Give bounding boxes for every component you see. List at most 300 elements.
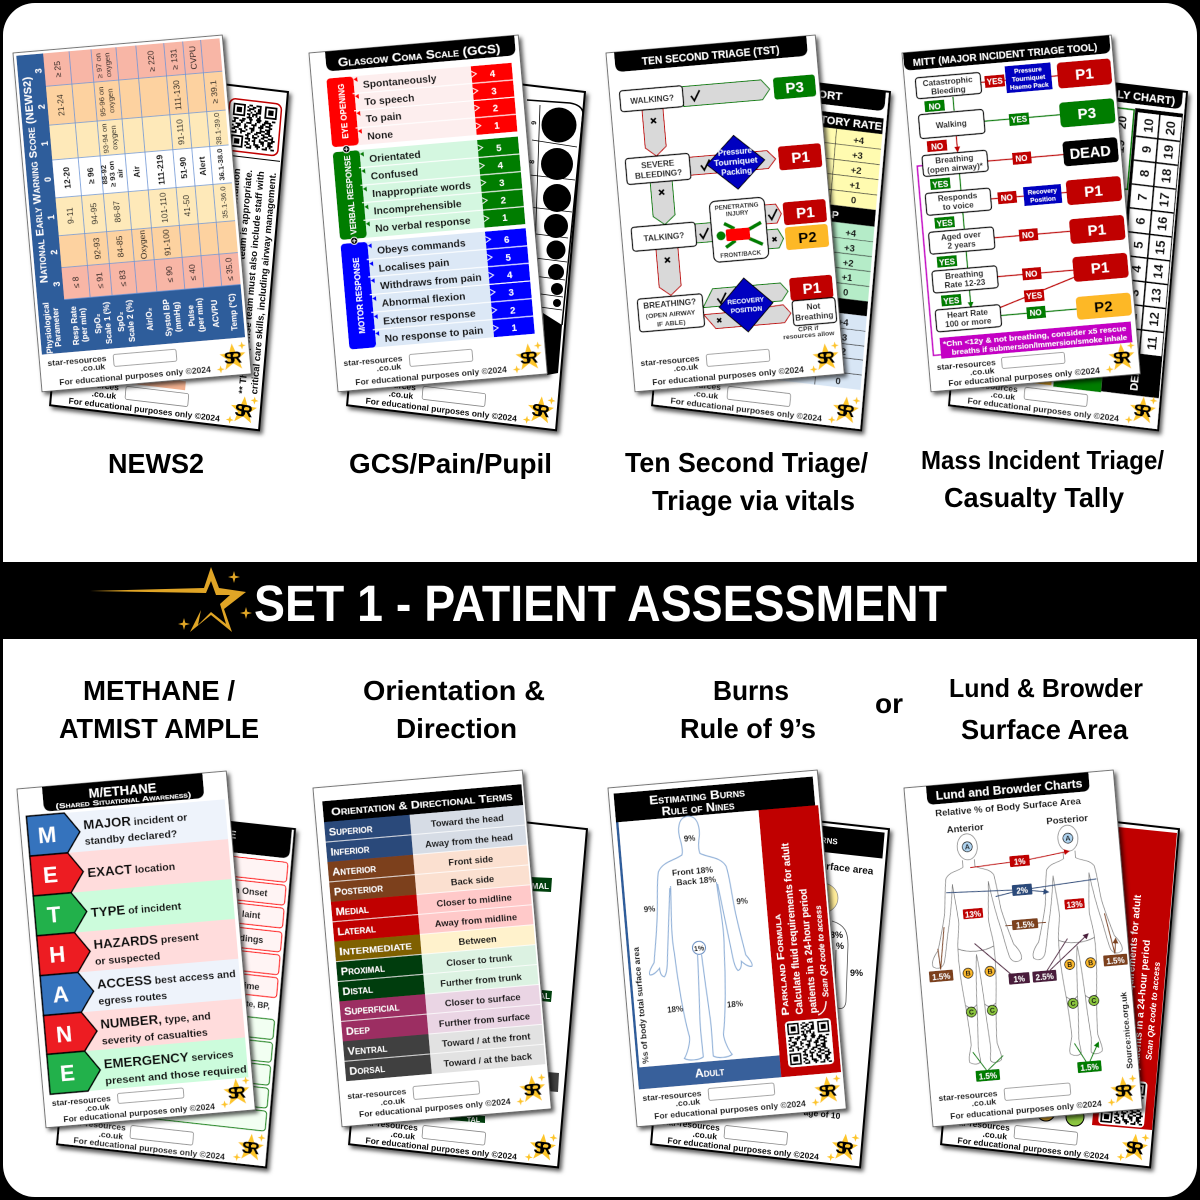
view labels	[946, 813, 1089, 836]
section: eye opening: 3	[491, 86, 497, 98]
footer: For educational purposes only ©2024	[950, 1098, 1102, 1121]
footer: For educational purposes only ©2024	[948, 365, 1101, 388]
priority badges: P1	[1087, 221, 1107, 240]
question boxes: TALKING?	[643, 231, 685, 243]
footer: SR	[1133, 400, 1152, 421]
table values: 91-100	[161, 229, 173, 256]
adult panel: Adult	[694, 1064, 725, 1081]
table values: ≥ 39.1	[208, 80, 220, 104]
heading: lund and browder	[949, 673, 1143, 745]
table values: 92-93	[91, 237, 103, 260]
row text: or suspected	[95, 950, 161, 968]
region letters: C	[990, 1008, 995, 1015]
region letters: C	[969, 1009, 974, 1017]
footer: SR	[818, 1081, 837, 1101]
section: verbal response: 4	[497, 160, 504, 172]
injury box with figure: FRONT/BACK	[720, 249, 762, 260]
header band: Glasgow Coma Scale (GCS)	[337, 42, 501, 70]
priority badges	[1055, 58, 1132, 320]
decision boxes	[915, 72, 1002, 332]
region letters: A	[1065, 835, 1071, 843]
section: motor response: Withdraws from pain	[380, 273, 482, 292]
caption: surface area	[814, 860, 874, 878]
definitions: Toward / at the back	[443, 1051, 533, 1069]
section: verbal response: 1	[502, 213, 509, 224]
section: verbal response: 3	[499, 178, 505, 189]
section: motor response: 3	[508, 287, 514, 299]
terms	[328, 821, 423, 1078]
parameter header: Scale 2 (%)	[124, 299, 137, 342]
table values: 101-110	[157, 192, 170, 223]
letters: E	[59, 1060, 76, 1086]
tag fragments	[450, 877, 559, 1124]
footer: star-resources	[60, 375, 120, 392]
header band: Lund and Browder Charts	[935, 778, 1083, 803]
footer: .co.uk	[388, 388, 414, 401]
section: eye opening: To pain	[365, 111, 402, 125]
header band	[91, 808, 292, 859]
footer	[659, 1112, 860, 1166]
section: motor response: 1	[511, 323, 518, 334]
percent tags: 2.5%	[1035, 972, 1054, 982]
table values: ≤ 35.0	[223, 257, 235, 281]
terms: Distal	[342, 984, 374, 998]
row text: NUMBER, type, and	[100, 1007, 211, 1032]
panel: ATMIST AMPLE back card	[57, 806, 295, 1167]
footer: .co.uk	[971, 1096, 997, 1108]
terms: Medial	[335, 904, 369, 918]
footer: .co.uk	[390, 1129, 416, 1142]
table values: oxygen	[105, 88, 116, 113]
blue action boxes: Position	[1030, 195, 1056, 205]
row text: EMERGENCY services	[103, 1046, 234, 1072]
vitals table: +3	[851, 150, 863, 162]
row backgrounds	[59, 799, 248, 1091]
yes and no tags: NO	[1022, 230, 1034, 240]
footer: .co.uk	[91, 388, 117, 401]
footer: .co.uk	[85, 1101, 110, 1113]
decision boxes: Responds	[937, 191, 978, 203]
footer	[47, 341, 248, 388]
blue action boxes	[1005, 62, 1062, 207]
yes and no tags: NO	[1000, 193, 1013, 203]
header band: TEN SECOND TRIAGE (TST)	[641, 44, 780, 68]
parameter header: Scale 1 (%)	[102, 301, 114, 344]
letters: E	[42, 862, 59, 888]
question boxes: (OPEN AIRWAY	[646, 309, 696, 321]
table values: ≥ 25	[52, 60, 63, 78]
red parkland panel: requirements for adult	[1124, 894, 1144, 1001]
percent tags: 13%	[1066, 900, 1083, 910]
action diamonds	[705, 133, 779, 334]
table values: 84-85	[114, 235, 126, 258]
yes and no tags	[922, 73, 1046, 327]
footer: SR	[1125, 1138, 1144, 1159]
footer: .co.uk	[693, 388, 719, 401]
tally grid	[1111, 108, 1183, 398]
footer: star-resources	[959, 377, 1018, 394]
footer: For educational purposes only ©2024	[355, 364, 507, 387]
heading: orientation and direction	[363, 675, 545, 744]
section: motor response: 6	[504, 235, 510, 246]
decision boxes: 100 or more	[945, 316, 992, 329]
score header: 1	[40, 141, 50, 147]
score header: 0	[43, 177, 53, 182]
injury box with figure: INJURY	[726, 209, 750, 218]
footer: .co.uk	[376, 361, 402, 373]
table values: ≤ 90	[164, 266, 175, 283]
panel: orientation back card	[349, 806, 587, 1167]
score header: 2	[49, 249, 59, 255]
table values: ≥ 131	[168, 48, 180, 70]
footer	[51, 1076, 252, 1125]
panel: triage via vitals back card	[652, 67, 890, 430]
region letters: C	[1091, 998, 1097, 1005]
table values: 86-87	[111, 200, 123, 223]
footer: For educational purposes only ©2024	[652, 364, 804, 387]
vitals table: 0	[850, 195, 857, 207]
table values: oxygen	[109, 125, 120, 150]
footer: SR	[241, 1138, 260, 1159]
footer: .co.uk	[982, 1129, 1008, 1142]
magenta note: breaths if submersion/Immersion/smoke inhale	[951, 333, 1127, 357]
tally grid: 15	[1152, 240, 1168, 256]
section: eye opening: EYE OPENING	[337, 83, 350, 139]
definitions: Back side	[450, 874, 495, 888]
priority badges: P3	[785, 79, 805, 97]
footer: For educational purposes only ©2024	[667, 1135, 819, 1162]
section: motor response: Abnormal flexion	[381, 292, 466, 310]
footer: star-resources	[67, 1116, 127, 1133]
parameter header: (mmHg)	[172, 301, 183, 332]
decision boxes: (open airway)*	[927, 161, 984, 175]
tag fragments: MAL	[532, 882, 549, 891]
tally grid: 11	[1144, 335, 1160, 351]
header band: REPORT	[794, 86, 843, 103]
footer: For educational purposes only ©2024	[967, 396, 1120, 424]
section: motor response: Obeys commands	[377, 238, 466, 257]
table values: ≥ 97 on	[93, 53, 104, 79]
footer: For educational purposes only ©2024	[365, 396, 518, 424]
footer: star-resources	[343, 353, 403, 368]
panel: rule of nines front card	[608, 770, 846, 1127]
percent tags: 13%	[965, 909, 981, 920]
letters: N	[55, 1021, 73, 1048]
tally grid: 14	[1150, 263, 1166, 280]
icon: QR code	[226, 98, 282, 156]
action diamonds: RECOVERY	[727, 296, 765, 307]
blue action boxes: Pressure	[1014, 66, 1043, 75]
heading: GCS/Pain/Pupil: GCS/Pain/Pupil	[349, 448, 552, 479]
decision boxes: Rate 12-23	[944, 278, 986, 290]
notes text: critical care skills, including airway management.	[249, 172, 279, 395]
heading: or: or	[875, 688, 903, 719]
heading: ten second triage: Ten Second Triage/	[625, 447, 868, 478]
footer: .co.uk	[990, 389, 1016, 402]
terms: Dorsal	[349, 1063, 386, 1078]
table values: 36.1-38.0	[215, 148, 227, 181]
footer: .co.uk	[692, 1129, 718, 1142]
row text: standby declared?	[84, 828, 178, 848]
footer	[65, 1112, 266, 1166]
header band	[687, 68, 886, 111]
table values: ≥ 96	[85, 167, 96, 184]
heading: NEWS2: NEWS2	[108, 448, 204, 479]
percent tags: 1.5%	[1016, 920, 1035, 930]
footer: For educational purposes only ©2024	[68, 396, 221, 424]
terms: Deep	[345, 1024, 371, 1038]
panel: casualty tally back card	[949, 67, 1187, 430]
terms: Proximal	[340, 963, 386, 978]
decision boxes: to voice	[942, 200, 975, 212]
section: verbal response: Confused	[370, 168, 419, 183]
row fragments: ime	[244, 980, 260, 992]
definitions: Toward the head	[430, 813, 505, 829]
score header: 3	[52, 281, 62, 287]
parkland panel: Scan QR code to access	[813, 905, 831, 998]
section: eye opening	[326, 63, 517, 147]
table remnant	[93, 370, 186, 390]
category strips: DEAD	[1128, 359, 1143, 392]
body diagram: 1%	[694, 945, 705, 953]
yes and no tags: YES	[943, 296, 960, 306]
footer: SR	[523, 1080, 542, 1100]
percent tags	[920, 847, 1137, 1085]
footer: .co.uk	[380, 1095, 406, 1107]
decision boxes: 2 years	[947, 239, 977, 251]
icon: plus signs	[342, 145, 358, 245]
priority badges: DEAD	[1069, 144, 1111, 163]
table values: ≥ 220	[145, 50, 157, 72]
section: verbal response: 2	[500, 195, 506, 207]
parameter header: Air/O₂	[144, 307, 155, 331]
heading: mass incident triage: Mass Incident Triage/	[921, 445, 1164, 475]
vitals table: +2	[835, 346, 846, 358]
definitions: Toward / at the front	[442, 1031, 531, 1049]
view labels: Anterior	[946, 822, 984, 836]
letters	[37, 822, 78, 1086]
header band: ATMIST AMPLE	[155, 821, 237, 842]
table values: ≤ 91	[94, 272, 105, 289]
parameter header: SpO₂	[93, 313, 103, 334]
tally grid: 5	[1130, 240, 1146, 249]
parameter header: (per min)	[78, 307, 90, 342]
notes text: ** The response team must also include staff with	[237, 170, 267, 395]
vitals table: +2	[842, 257, 854, 270]
footer: star-resources	[661, 1116, 721, 1133]
heading: orientation and direction: Orientation &	[363, 675, 545, 706]
table values: 95-96 on	[96, 86, 108, 117]
priority badges: P2	[1094, 298, 1113, 316]
banner	[0, 562, 1200, 639]
category strips	[1001, 338, 1162, 399]
panel: orientation front card	[313, 770, 551, 1127]
vitals table: +3	[844, 242, 855, 255]
icon: QR code	[1098, 1078, 1148, 1128]
tally grid: 2	[1124, 312, 1140, 321]
row fragments	[224, 885, 280, 1011]
yes and no tags: NO	[928, 102, 941, 112]
footer: SR	[227, 1083, 247, 1103]
tally grid: 7	[1135, 193, 1150, 202]
body diagram: 9%	[683, 834, 696, 844]
score header	[33, 68, 62, 287]
footer: For educational purposes only ©2024	[59, 364, 211, 387]
vertical note: %s of body total surface area	[631, 947, 651, 1064]
vitals table: BP	[824, 208, 839, 222]
heading: burns rule of 9s: Burns	[713, 675, 789, 706]
terms: Inferior	[330, 843, 370, 859]
footer: For educational purposes only ©2024	[365, 1135, 517, 1162]
action diamonds: Tourniquet	[714, 154, 758, 168]
priority badges: P1	[796, 204, 815, 222]
child figure: 8%	[830, 930, 843, 940]
tally grid: 4	[1128, 264, 1144, 273]
footer: For educational purposes only ©2024	[73, 1135, 225, 1162]
panel: MITT front card	[902, 35, 1140, 392]
table: national early warning score	[16, 38, 245, 355]
icon: shooting star	[90, 567, 252, 632]
yes and no tags: YES	[939, 257, 956, 268]
body diagram: Back 18%	[676, 874, 717, 887]
footer: SR	[223, 348, 243, 368]
pupil scale chart	[525, 100, 583, 375]
row text: MAJOR incident or	[83, 809, 188, 832]
section: verbal response: Inappropriate words	[372, 181, 472, 200]
red parkland panel: patients in a 24-hour period	[1131, 939, 1153, 1071]
section: motor response: 4	[507, 270, 514, 281]
parameter header: Physiological	[41, 302, 55, 354]
decision boxes: Catastrophic	[922, 75, 973, 88]
table values: 9-11	[64, 207, 76, 224]
table values: CVPU	[187, 45, 199, 70]
tally grid: 6	[1132, 217, 1148, 226]
notes text	[213, 168, 279, 396]
heading: lund and browder: Lund & Browder	[949, 673, 1143, 703]
footer	[347, 1073, 548, 1120]
footer	[343, 341, 544, 388]
header band: Rule of Nines	[661, 798, 736, 818]
priority badges: P1	[802, 280, 822, 298]
priority badges: P3	[1077, 105, 1097, 123]
row fragments: te, BP,	[246, 1000, 270, 1011]
panel: METHANE front card	[17, 771, 255, 1128]
vitals table: +4	[845, 227, 857, 240]
footer: SR	[1114, 1081, 1133, 1101]
row text: HAZARDS present	[93, 928, 200, 952]
region letters: B	[987, 969, 993, 976]
vitals table: RESPIRATORY RATE	[772, 108, 882, 133]
header band	[325, 35, 516, 72]
footer: For educational purposes only ©2024	[359, 1096, 511, 1119]
page note: age of 10	[803, 1107, 841, 1121]
notes text: team is appropriate.	[236, 169, 255, 260]
decision boxes: Breathing	[935, 153, 974, 166]
section: eye opening: To speech	[364, 93, 415, 108]
panel: pupil scale back card	[347, 67, 585, 430]
footer: star-resources	[357, 375, 417, 392]
body diagram: Front 18%	[672, 864, 714, 878]
definitions: Closer to midline	[436, 892, 512, 909]
header band	[613, 776, 815, 822]
section: eye opening: 2	[492, 103, 499, 114]
table values: 21-24	[55, 94, 67, 116]
pupil scale chart: 9	[531, 121, 538, 125]
row fragments: dings	[239, 932, 264, 945]
vitals table: 0	[843, 287, 849, 299]
tally grid: 9	[1139, 145, 1154, 154]
child figure	[806, 883, 863, 1008]
parameter header: Resp Rate	[69, 305, 81, 346]
footer: star-resources	[936, 357, 996, 372]
terms: Superior	[328, 823, 373, 839]
check and cross marks	[649, 84, 786, 327]
blue action boxes: Haemo Pack	[1010, 82, 1049, 92]
terms: Posterior	[333, 882, 384, 899]
footer	[642, 1074, 843, 1122]
parkland panel: patients in a 24-hour period	[798, 888, 820, 1014]
definitions: Between	[458, 934, 497, 947]
region letters: B	[965, 970, 971, 978]
tally grid: 16	[1154, 216, 1170, 232]
yes and no tags: YES	[1026, 291, 1043, 301]
definitions	[421, 812, 534, 1069]
footer	[660, 373, 861, 428]
body diagram: 9%	[643, 904, 656, 914]
magenta note: *Chn <12y & not breathing, consider x5 rescue	[943, 324, 1127, 349]
section: verbal response: 5	[496, 143, 503, 154]
vitals table: +1	[849, 180, 861, 192]
injury box with figure	[709, 197, 769, 263]
footer: SR	[519, 348, 539, 368]
section: verbal response: VERBAL RESPONSE	[343, 154, 359, 235]
footer: star-resources	[938, 1088, 998, 1103]
section: motor response: Localises pain	[378, 258, 450, 275]
footer: .co.uk	[673, 361, 699, 373]
vitals table	[663, 95, 884, 390]
row fragments: laint	[242, 909, 261, 921]
score header: 2	[36, 104, 47, 110]
terms: Ventral	[347, 1043, 388, 1058]
row text: present and those required	[105, 1063, 247, 1088]
region letters	[955, 834, 1097, 1017]
table values: Oxygen	[137, 229, 149, 260]
yes and no tags: NO	[1029, 308, 1042, 318]
table values	[51, 43, 235, 295]
footer: star-resources	[347, 1086, 407, 1101]
priority badges	[772, 74, 834, 301]
table title: National Early Warning Score (NEWS2)	[21, 76, 51, 284]
region letters: A	[965, 844, 970, 852]
vitals table: 0	[835, 376, 841, 388]
tally grid: 17	[1156, 192, 1172, 208]
footer	[355, 373, 556, 428]
header band: M/ETHANE	[88, 780, 157, 801]
question boxes: BLEEDING?	[635, 168, 683, 181]
region letters: C	[1070, 1001, 1076, 1008]
region letters: B	[1067, 962, 1073, 969]
header band: Estimating Burns	[649, 785, 746, 807]
header band	[685, 811, 885, 859]
region markers	[952, 832, 1099, 1017]
decision boxes: Bleeding	[931, 85, 966, 97]
magenta bypass line	[917, 165, 942, 355]
footer	[357, 1112, 558, 1166]
percent tags: 1.5%	[978, 1071, 997, 1082]
vitals table: +2	[850, 165, 862, 177]
table values: ≤ 8	[70, 276, 81, 289]
vitals table: +1	[833, 361, 846, 373]
